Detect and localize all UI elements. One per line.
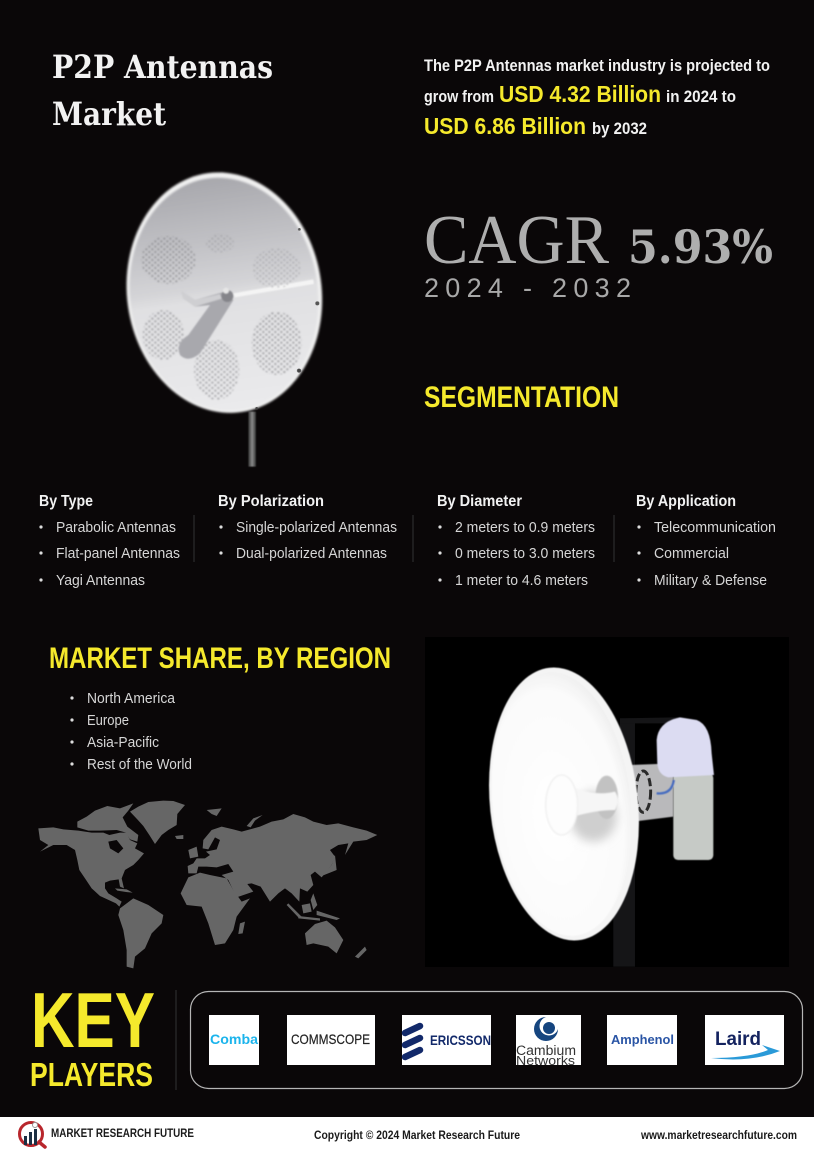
heading: market share by region: MARKET SHARE, BY REGION — [49, 642, 391, 675]
mounting pole — [248, 412, 256, 467]
logo: Ericsson: ERICSSON — [430, 1032, 491, 1048]
world map — [38, 801, 377, 968]
title: P2P Antennas — [52, 48, 273, 86]
market projection text — [424, 57, 770, 139]
region list: Asia-Pacific — [87, 734, 159, 751]
logo: Laird: Laird — [715, 1029, 761, 1050]
dish body — [111, 160, 337, 426]
radio unit — [657, 717, 714, 860]
region list — [70, 690, 192, 773]
key players heading: PLAYERS — [30, 1056, 153, 1093]
market projection text: by 2032 — [592, 120, 647, 138]
logo: CommScope — [287, 1015, 375, 1065]
segment column: by polarization — [218, 493, 397, 562]
footer bar — [0, 1117, 814, 1150]
CAGR callout — [424, 202, 773, 303]
logo: Cambium Networks — [516, 1015, 581, 1068]
logo: Amphenol: Amphenol — [611, 1032, 674, 1047]
market projection text: grow from — [424, 88, 494, 106]
market projection text: USD 4.32 Billion — [499, 81, 661, 107]
segment column: by application: Commercial — [654, 545, 729, 562]
key players panel — [190, 992, 802, 1088]
logo: Cambium Networks: Cambium — [516, 1043, 576, 1058]
segment column: by diameter — [437, 493, 595, 589]
segment column: by type: Flat-panel Antennas — [56, 545, 180, 562]
icon: perforated parabolic dish antenna — [111, 160, 337, 467]
market projection text: The P2P Antennas market industry is projected to — [424, 57, 770, 75]
segment column: by diameter: 2 meters to 0.9 meters — [455, 519, 595, 536]
brand name: MARKET RESEARCH FUTURE — [51, 1126, 194, 1140]
market projection text: in 2024 to — [666, 88, 736, 106]
CAGR callout: 5.93% — [628, 220, 773, 274]
logo: Comba: Comba — [210, 1031, 258, 1047]
segment column: by diameter: By Diameter — [437, 493, 522, 510]
region list: Rest of the World — [87, 756, 192, 773]
segment column: by application: Telecommunication — [654, 519, 776, 536]
title — [52, 48, 273, 133]
market projection text: USD 6.86 Billion — [424, 113, 586, 139]
region list: Europe — [87, 712, 129, 729]
bracket plate — [630, 763, 673, 822]
logo: Cambium Networks: Networks — [516, 1053, 576, 1068]
title: Market — [52, 95, 166, 133]
segment column: by type: Yagi Antennas — [56, 572, 145, 589]
pole and bracket — [613, 717, 680, 967]
CAGR callout: 2024 - 2032 — [424, 273, 631, 303]
segment column: by application: Military & Defense — [654, 572, 767, 589]
segment column: by application: By Application — [636, 493, 736, 510]
logo: CommScope: COMMSCOPE — [291, 1031, 370, 1047]
feed horn — [546, 775, 618, 835]
segment column: by application — [636, 493, 776, 589]
region list: North America — [87, 690, 176, 707]
segment column: by polarization: By Polarization — [218, 493, 324, 510]
segment column: by diameter: 1 meter to 4.6 meters — [455, 572, 588, 589]
CAGR callout: CAGR — [424, 202, 609, 279]
dish — [476, 660, 652, 948]
copyright: Copyright © 2024 Market Research Future — [314, 1128, 520, 1142]
key players heading: KEY — [31, 976, 155, 1064]
photo panel: dish antenna with radio — [425, 637, 789, 967]
segment column: by diameter: 0 meters to 3.0 meters — [455, 545, 595, 562]
segment column: by polarization: Single-polarized Antennas — [236, 519, 397, 536]
segment column: by type — [39, 493, 180, 589]
logo: Amphenol — [607, 1015, 677, 1065]
segment column: by type: By Type — [39, 493, 93, 510]
logo: Comba — [209, 1015, 259, 1065]
logo: Ericsson — [402, 1015, 491, 1065]
segment column: by type: Parabolic Antennas — [56, 519, 176, 536]
logo: Laird — [705, 1015, 784, 1065]
key players heading — [30, 976, 155, 1093]
heading: segmentation: SEGMENTATION — [424, 381, 619, 414]
segment column: by polarization: Dual-polarized Antennas — [236, 545, 387, 562]
icon: market research future logo — [20, 1122, 45, 1147]
